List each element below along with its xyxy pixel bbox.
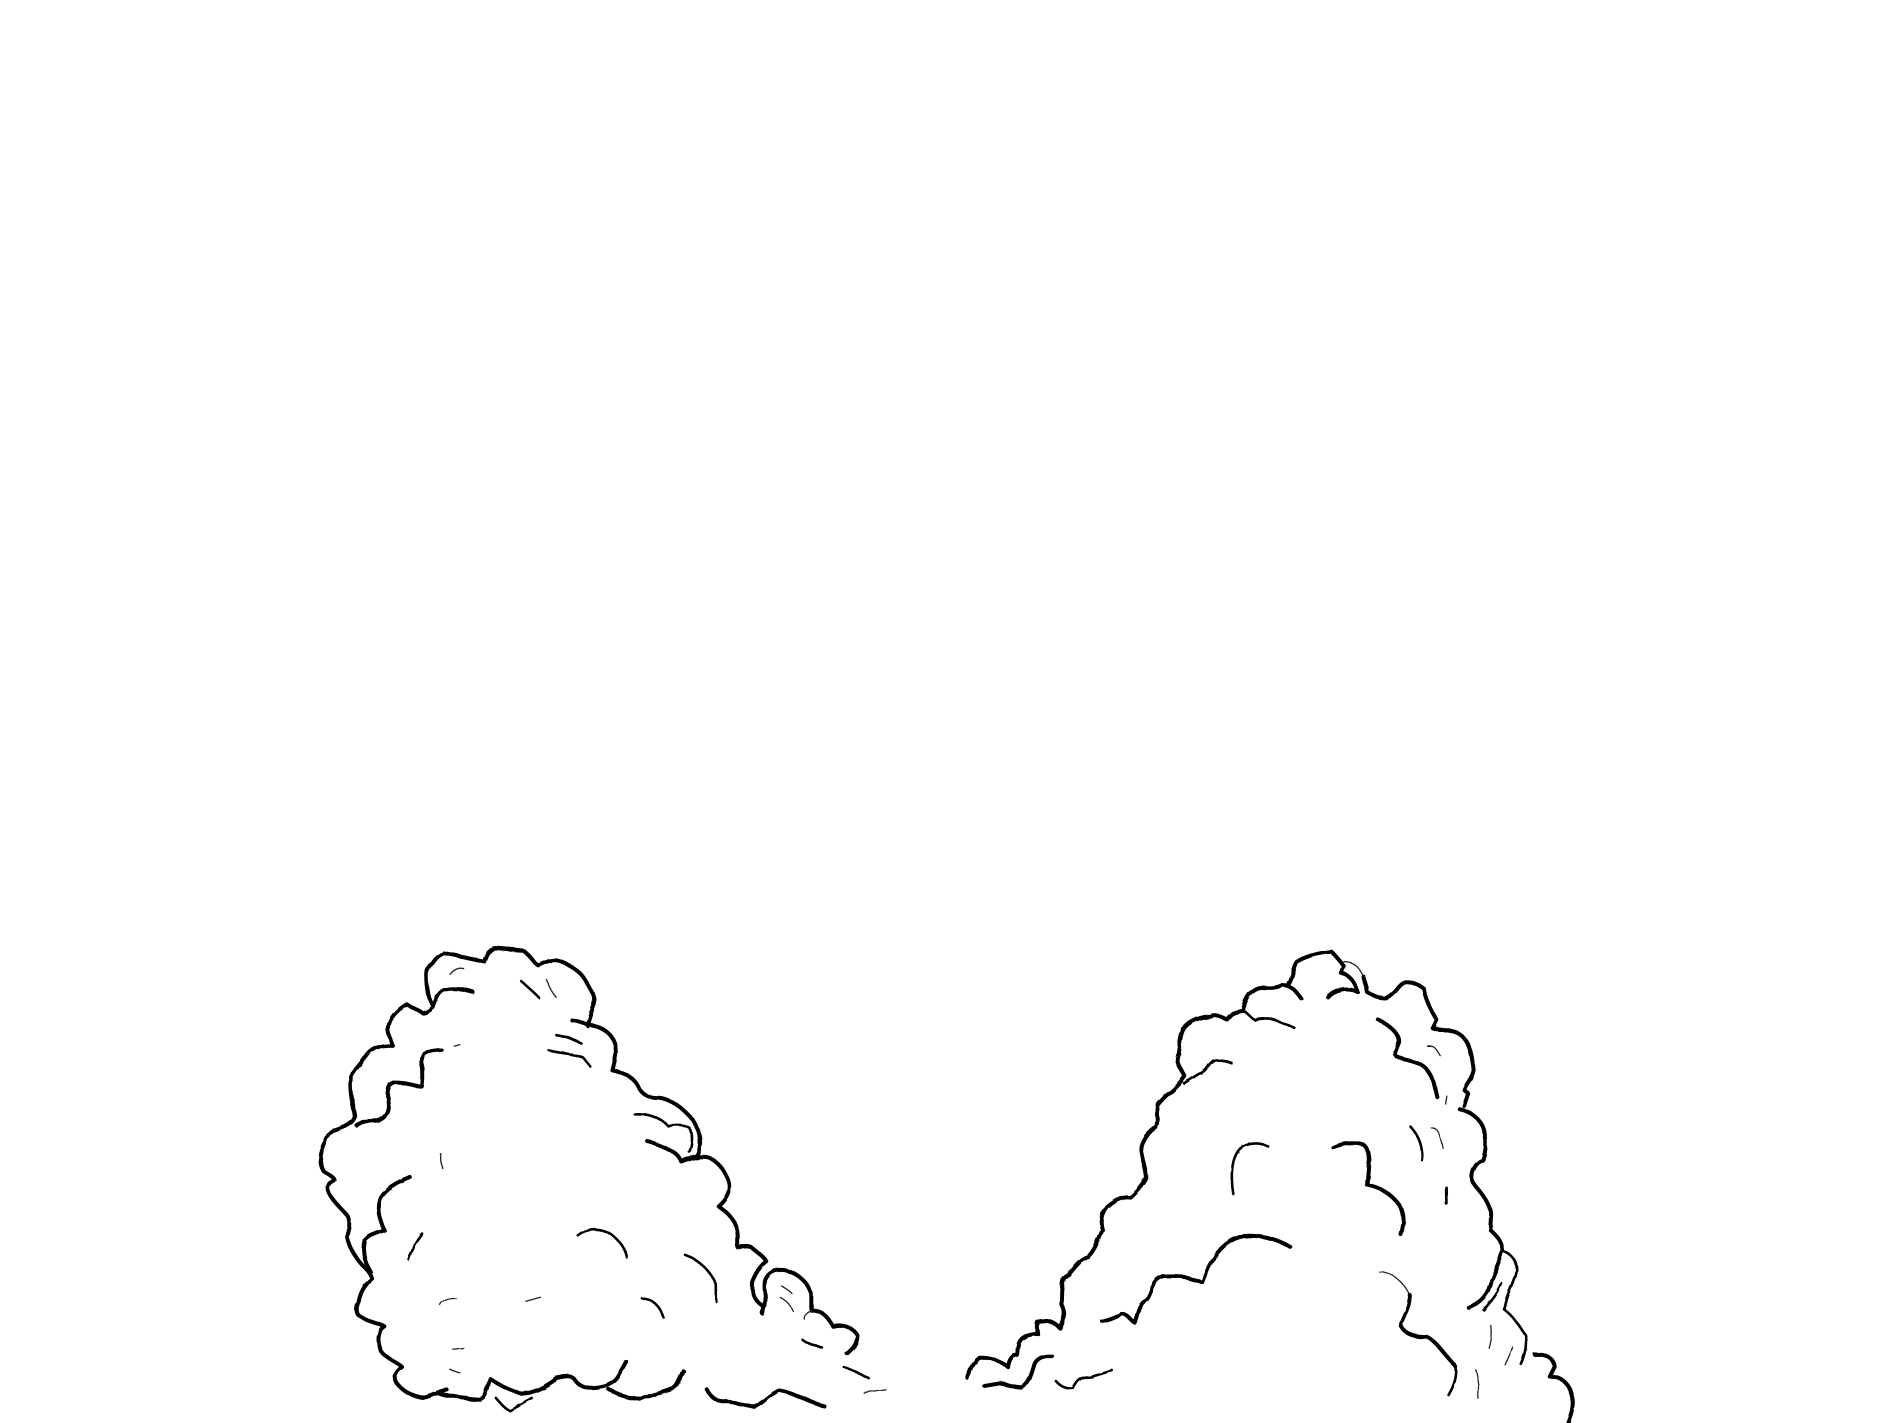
cloud: right [968,952,1573,1423]
cloud: left [320,948,886,1410]
